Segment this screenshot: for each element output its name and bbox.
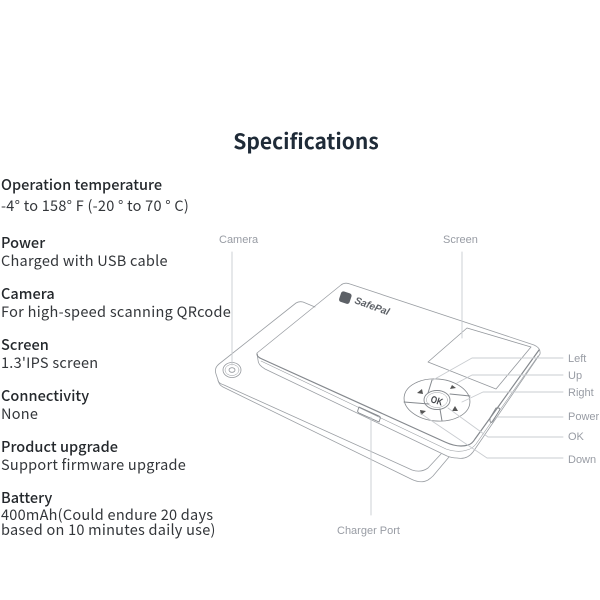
spec: screen: 1.3'IPS screen bbox=[1, 352, 98, 373]
spec: operation temperature: -4° to 158° F (-20 ° to 70 ° C) bbox=[1, 195, 189, 216]
spec: operation temperature: Operation temperature bbox=[1, 174, 162, 195]
spec: operation temperature bbox=[1, 174, 189, 216]
spec: battery: 400mAh(Could endure 20 days bbox=[1, 504, 213, 525]
callout labels: Screen bbox=[443, 234, 478, 246]
spec: connectivity: Connectivity bbox=[1, 385, 89, 406]
logo: SafePal bbox=[353, 295, 391, 318]
camera lens bbox=[223, 362, 241, 378]
power button bbox=[490, 408, 500, 422]
callout labels bbox=[219, 234, 600, 537]
spec: battery: Battery bbox=[1, 487, 52, 508]
spec: power: Power bbox=[1, 232, 45, 253]
spec: product upgrade bbox=[1, 436, 186, 475]
callout labels: Camera bbox=[219, 234, 259, 246]
d-pad buttons bbox=[402, 376, 472, 424]
callout labels: Power bbox=[568, 411, 600, 423]
spec: camera: For high-speed scanning QRcode bbox=[1, 301, 231, 322]
spec: camera: Camera bbox=[1, 283, 55, 304]
spec: product upgrade: Support firmware upgrade bbox=[1, 454, 186, 475]
spec: battery: based on 10 minutes daily use) bbox=[1, 519, 216, 540]
spec: battery bbox=[1, 487, 216, 540]
spec: power: Charged with USB cable bbox=[1, 250, 168, 271]
callout labels: Charger Port bbox=[337, 525, 400, 537]
charger port bbox=[358, 407, 380, 422]
spec: screen bbox=[1, 334, 98, 373]
callout labels: Right bbox=[568, 387, 594, 399]
spec: screen: Screen bbox=[1, 334, 49, 355]
callout labels: OK bbox=[568, 431, 585, 443]
spec: product upgrade: Product upgrade bbox=[1, 436, 118, 457]
device body bbox=[215, 283, 540, 482]
callout labels: Left bbox=[568, 353, 586, 365]
spec: connectivity bbox=[1, 385, 89, 424]
logo bbox=[338, 291, 391, 318]
leader lines bbox=[232, 252, 563, 515]
callout labels: Down bbox=[568, 454, 596, 466]
spec: camera bbox=[1, 283, 231, 322]
d-pad buttons: OK bbox=[429, 394, 445, 409]
callout labels: Up bbox=[568, 370, 582, 382]
screen outline bbox=[428, 328, 531, 389]
title: Specifications bbox=[233, 126, 379, 156]
spec: connectivity: None bbox=[1, 403, 38, 424]
spec: power bbox=[1, 232, 168, 271]
